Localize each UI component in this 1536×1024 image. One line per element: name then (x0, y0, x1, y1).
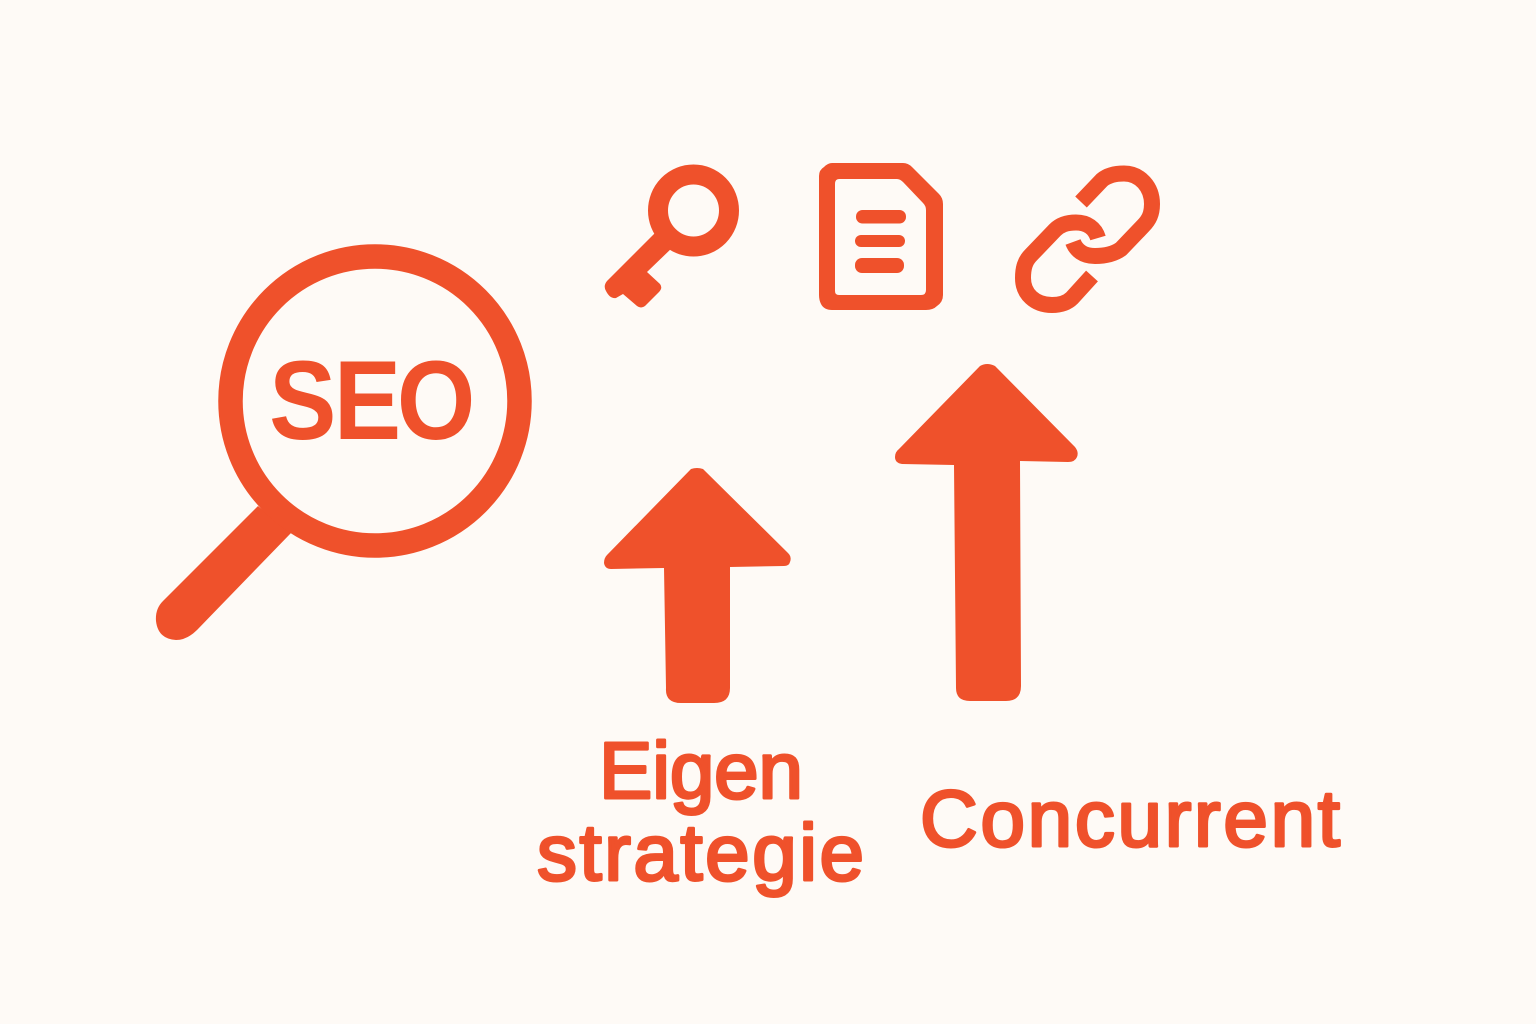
icon: magnifying glass with SEO (156, 256, 520, 640)
icon: chain link (1023, 174, 1152, 305)
document text line 1 (856, 210, 906, 224)
magnifier handle (156, 506, 291, 640)
SEO label: SEO (269, 338, 475, 463)
label: Concurrent: Concurrent (920, 774, 1340, 863)
document text line 3 (855, 258, 904, 273)
key ring (658, 174, 729, 246)
key bit and shaft (605, 232, 674, 308)
label line: Eigen: Eigen (599, 726, 803, 815)
magnifier ring (230, 256, 520, 546)
arrow: eigen strategie (shorter) (604, 468, 791, 703)
lower link (1023, 222, 1098, 305)
upper link (1073, 174, 1152, 256)
document outline (819, 163, 943, 310)
icon: document (819, 163, 943, 310)
document text line 2 (855, 235, 905, 247)
arrow: concurrent (taller) (895, 364, 1078, 701)
label line: strategie: strategie (537, 808, 864, 897)
icon: key (605, 174, 729, 308)
label: Eigen strategie (537, 726, 864, 897)
